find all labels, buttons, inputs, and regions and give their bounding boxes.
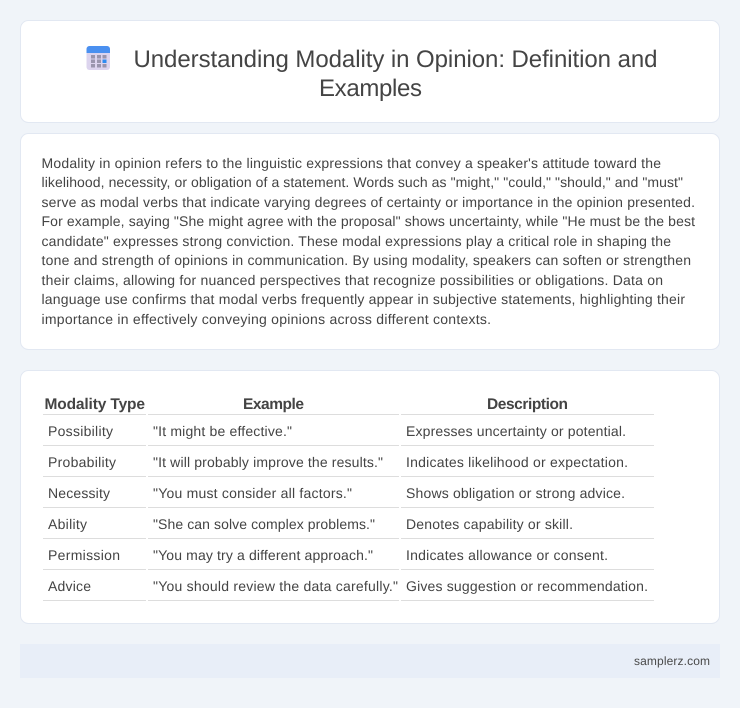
table row: ability: Denotes capability or skill. [406,516,573,532]
table row: advice: "You should review the data carefully." [153,578,398,594]
icon: calendar [86,46,110,70]
table row: permission: Permission [48,547,120,563]
table row: probability: Probability [48,454,116,470]
text block: definition paragraph: their claims, allowing for nuanced perspectives that recognize possibilities or obligations. Data on [42,272,663,288]
table row: necessity: Necessity [48,485,110,501]
table row: ability: Ability [48,516,87,532]
text block: definition paragraph: importance in effectively conveying opinions across different contexts. [42,311,491,327]
table row: possibility: Expresses uncertainty or potential. [406,423,626,439]
table row: probability [43,454,654,476]
title: Understanding Modality in Opinion: Definition and [134,46,658,73]
table row: necessity: Shows obligation or strong advice. [406,485,625,501]
table row: advice: Advice [48,578,91,594]
table header row [43,396,654,414]
table row: permission [43,547,654,570]
text block: definition paragraph: serve as modal verbs that indicate varying degrees of certainty or importance in the opinion presented. [42,194,695,210]
table row: necessity [43,485,654,508]
title [134,46,658,102]
table row: probability: Indicates likelihood or expectation. [406,454,628,470]
footer [20,644,720,678]
text block: definition paragraph [42,155,695,327]
table row: necessity: "You must consider all factors." [153,485,352,501]
text block: definition paragraph: likelihood, necessity, or obligation of a statement. Words such as "might," "could," "should," and "must" [42,174,683,190]
table row: permission: Indicates allowance or consent. [406,547,608,563]
table row: advice [43,578,654,600]
table header row: Modality Type [44,396,145,413]
footer: samplerz.com [634,654,710,668]
text block: definition paragraph: candidate" expresses strong conviction. These modal expressions play a critical role in shaping the [42,233,671,249]
text block: definition paragraph: Modality in opinion refers to the linguistic expressions that convey a speaker's attitude toward the [42,155,661,171]
table row: probability: "It will probably improve the results." [153,454,383,470]
text block: definition paragraph: tone and strength of opinions in communication. By using modality, speakers can soften or strengthen [42,252,691,268]
text block: definition paragraph: For example, saying "She might agree with the proposal" shows uncertainty, while "He must be the best [42,213,695,229]
panel: header [20,20,720,122]
table row: possibility: "It might be effective." [153,423,292,439]
table row: advice: Gives suggestion or recommendation. [406,578,648,594]
table row: permission: "You may try a different approach." [153,547,373,563]
title: Examples [319,75,422,102]
table header row: Description [487,396,568,413]
table row: possibility: Possibility [48,423,113,439]
table row: possibility [43,423,654,446]
panel: definition text [20,134,720,350]
table row: ability [43,516,654,538]
text block: definition paragraph: language use confirms that modal verbs frequently appear in subjective statements, highlighting their [42,291,685,307]
table header row: Example [243,396,304,413]
table row: ability: "She can solve complex problems." [153,516,375,532]
panel: modality table [20,370,720,624]
